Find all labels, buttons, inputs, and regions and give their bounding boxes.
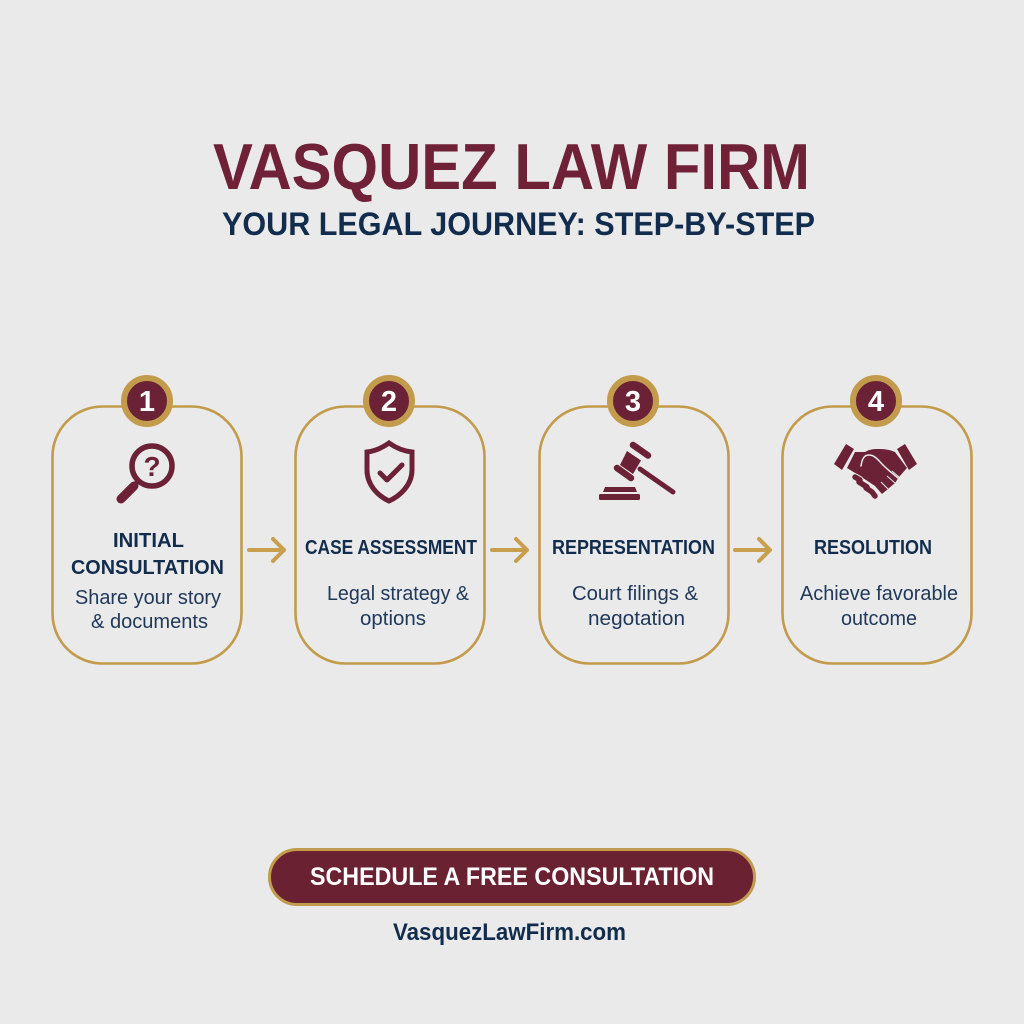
- step 1 description: [75, 587, 221, 633]
- step 2 number badge: [366, 378, 412, 424]
- step 3 number badge: [610, 378, 656, 424]
- call to action button: SCHEDULE A FREE CONSULTATION: [310, 863, 714, 891]
- step 4 description: [800, 583, 958, 630]
- panel: step 1 initial consultation: [52, 378, 242, 664]
- step 2 heading: CASE ASSESSMENT: [305, 537, 477, 559]
- arrow: step 2 to step 3: [492, 539, 527, 561]
- step 1 heading: [71, 530, 224, 579]
- panel: step 2 case assessment: [296, 378, 484, 664]
- step 3 description: [572, 583, 699, 630]
- step 1 description: Share your story: [75, 587, 221, 609]
- icon: magnifying glass with question mark: [121, 446, 172, 499]
- panel: step 3 representation: [540, 378, 728, 664]
- step 1 number badge: [124, 378, 170, 424]
- step 2 number badge: 2: [381, 386, 397, 418]
- arrow: step 1 to step 2: [249, 539, 284, 561]
- icon: gavel: [599, 445, 673, 500]
- website address: VasquezLawFirm.com: [393, 919, 626, 946]
- step 3 heading: REPRESENTATION: [552, 537, 715, 559]
- step 1 heading: INITIAL: [113, 530, 184, 552]
- step 1 description: & documents: [91, 611, 208, 633]
- arrow: step 3 to step 4: [735, 539, 770, 561]
- step 3 description: negotation: [588, 608, 685, 630]
- step 4 number badge: [853, 378, 899, 424]
- step 3 number badge: 3: [625, 386, 641, 418]
- step 4 number badge: 4: [868, 386, 884, 418]
- icon: shield with check mark: [367, 443, 412, 501]
- step 2 description: options: [360, 608, 426, 630]
- icon: magnifying glass with question mark: ?: [143, 451, 161, 482]
- step 2 description: Legal strategy &: [327, 583, 470, 605]
- step 4 description: outcome: [841, 608, 917, 630]
- title: VASQUEZ LAW FIRM: [213, 130, 810, 203]
- call to action button: [270, 850, 754, 904]
- step 1 heading: CONSULTATION: [71, 557, 224, 579]
- panel: step 4 resolution: [782, 378, 972, 664]
- icon: handshake: [834, 444, 917, 496]
- step 2 description: [327, 583, 470, 630]
- step 4 heading: RESOLUTION: [814, 537, 932, 559]
- step 1 number badge: 1: [139, 386, 155, 418]
- step 4 description: Achieve favorable: [800, 583, 958, 605]
- subtitle: YOUR LEGAL JOURNEY: STEP-BY-STEP: [222, 206, 815, 242]
- step 3 description: Court filings &: [572, 583, 699, 605]
